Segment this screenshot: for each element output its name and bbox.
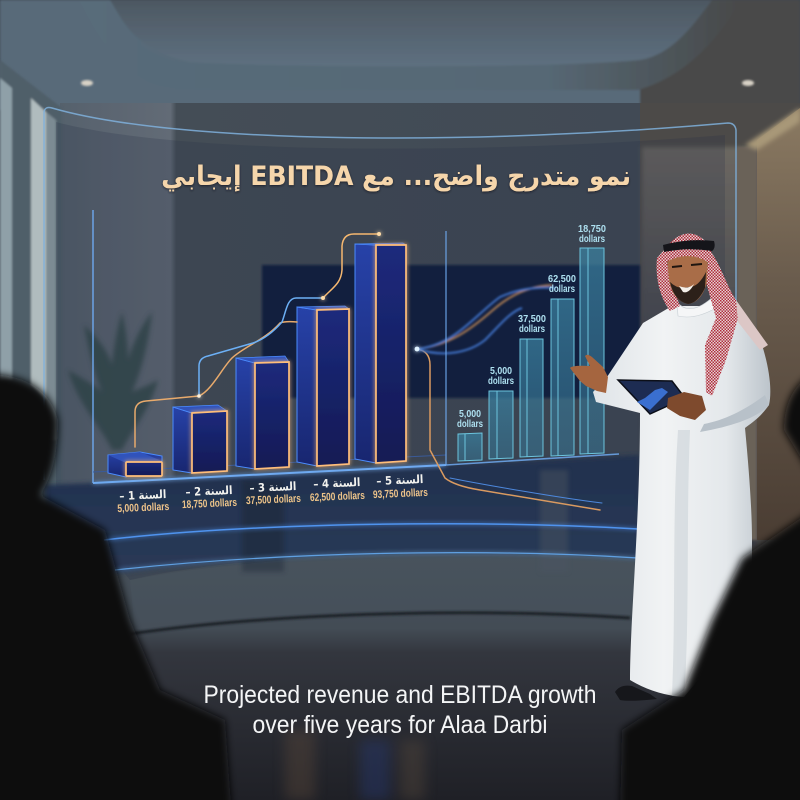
right bar labels: dollars [457, 418, 483, 430]
right bar labels: dollars [488, 375, 514, 387]
ceiling [0, 0, 800, 190]
right bar chart: axes [446, 231, 619, 465]
panel: curved glass screen [44, 108, 736, 634]
back wall [60, 103, 642, 563]
right bar labels: dollars [519, 323, 545, 335]
presenter [570, 233, 770, 701]
right bar labels: 5,000 [459, 408, 481, 420]
label: year 4: 62,500 dollars [310, 490, 365, 504]
right bar labels: 62,500 [548, 273, 576, 285]
title: نمو متدرج واضح... مع EBITDA إيجابي [161, 161, 631, 192]
blurred trend lines [417, 285, 555, 353]
right wall with warm wood panel [640, 103, 800, 563]
label: year 4: السنة 4 – [313, 475, 361, 491]
windows on left [0, 60, 62, 560]
thobe [593, 306, 770, 697]
right bar labels: dollars [579, 233, 605, 245]
caption: Projected revenue and EBITDA growth [204, 681, 596, 709]
right bars [458, 248, 604, 461]
headdress top and agal [664, 233, 712, 262]
data points [197, 232, 419, 398]
right bar labels: dollars [549, 283, 575, 295]
label: year 3: السنة 3 – [249, 479, 297, 495]
reflections on floor [285, 730, 425, 800]
ghutra and drape [657, 248, 738, 396]
label: year 3: 37,500 dollars [246, 493, 301, 507]
year labels [117, 472, 428, 515]
neck collar [677, 296, 716, 317]
bar: year 3 [236, 356, 289, 469]
face [667, 253, 708, 304]
bar: year 2 [173, 405, 227, 473]
label: year 2 [181, 483, 237, 511]
label: year 3 [245, 479, 301, 507]
connector lines [135, 234, 602, 510]
potted plant [68, 312, 158, 450]
wall screen [262, 265, 640, 398]
label: year 5: السنة 5 – [376, 472, 424, 488]
right bar labels: 5,000 [490, 365, 512, 377]
right bar labels: 37,500 [518, 313, 546, 325]
label: year 5 [372, 472, 428, 501]
label: year 1: 5,000 dollars [117, 501, 170, 515]
ceiling lights [81, 80, 754, 86]
thobe shading [672, 430, 690, 697]
label: year 2: 18,750 dollars [182, 497, 237, 511]
bar: year 5 [355, 243, 406, 463]
label: year 1 [117, 487, 170, 515]
hand pointing [570, 355, 608, 393]
right bar labels: 18,750 [578, 223, 606, 235]
table legs seen through glass [242, 470, 568, 572]
bar: year 1 [108, 452, 162, 477]
right bar labels [457, 223, 606, 430]
caption [204, 681, 596, 739]
caption: over five years for Alaa Darbi [252, 711, 548, 739]
audience silhouettes [0, 370, 800, 800]
left bar chart: axes [93, 210, 446, 483]
tablet [618, 380, 685, 414]
bar: year 4 [297, 306, 349, 466]
label: year 5: 93,750 dollars [373, 487, 428, 501]
label: year 4 [309, 475, 365, 504]
label: year 1: السنة 1 – [119, 487, 167, 503]
floor [0, 555, 800, 800]
label: year 2: السنة 2 – [185, 483, 233, 499]
left person [0, 374, 232, 800]
hand on tablet [667, 392, 706, 420]
shoe [615, 686, 657, 701]
right person [620, 370, 800, 800]
